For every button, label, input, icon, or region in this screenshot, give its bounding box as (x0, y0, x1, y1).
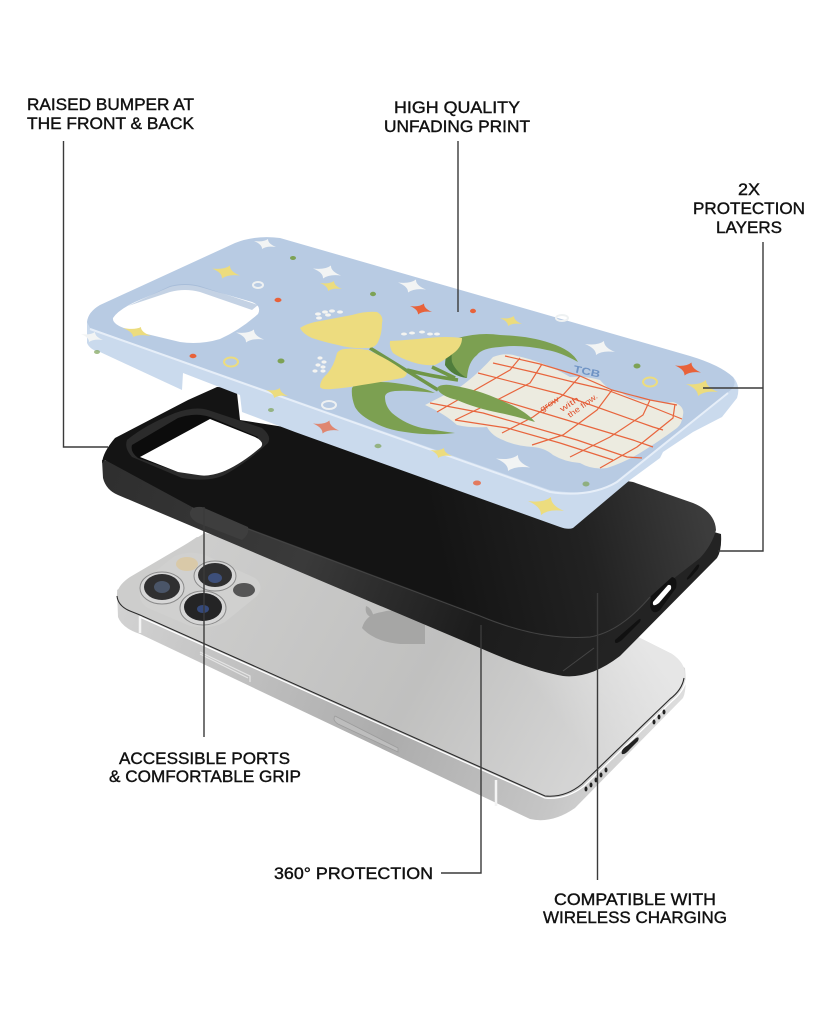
label: wireless charging: COMPATIBLE WITH (554, 890, 716, 909)
camera opening ring (126, 409, 269, 480)
flash (176, 557, 198, 571)
white opening (140, 419, 262, 476)
side button (200, 652, 250, 682)
leader line: raised bumper (64, 141, 108, 447)
antenna bands (140, 616, 496, 806)
case edge highlight (192, 508, 650, 638)
yellow stars (119, 262, 722, 520)
phone rim (117, 596, 684, 796)
label: accessible ports (109, 749, 301, 786)
leader line: 360 protection (441, 625, 481, 873)
black case (102, 387, 721, 676)
blue printed case (78, 236, 738, 529)
label: raised bumper: RAISED BUMPER AT (27, 95, 194, 114)
speaker and port (584, 710, 666, 792)
label: accessible ports: ACCESSIBLE PORTS (119, 749, 290, 768)
rim highlight (90, 329, 728, 494)
upper leaf (445, 334, 578, 378)
handwritten quote: with (557, 395, 581, 414)
label: protection layers: 2X (738, 180, 760, 199)
lower leaf (352, 382, 455, 434)
phone side band (117, 537, 686, 820)
label: wireless charging: WIRELESS CHARGING (543, 908, 727, 927)
case side band (102, 460, 721, 676)
red stars (310, 300, 704, 437)
label: high quality print (384, 98, 530, 136)
label: high quality print: HIGH QUALITY (394, 98, 520, 117)
plant illustration (300, 309, 683, 468)
cream patterned paper (425, 354, 683, 468)
leader line: high quality print (457, 141, 459, 312)
label: raised bumper: THE FRONT & BACK (27, 114, 195, 133)
red dots (190, 298, 481, 486)
red grid lines (430, 356, 682, 468)
camera module (140, 553, 261, 627)
label: protection layers: LAYERS (716, 218, 782, 237)
volume button (334, 716, 398, 752)
white stamens (312, 309, 440, 373)
middle leaf (437, 385, 535, 422)
blue case side band (87, 322, 738, 529)
label: raised bumper (27, 95, 195, 133)
green dots (94, 256, 640, 486)
handwritten quote: grow (538, 395, 561, 414)
camera bump (140, 553, 261, 627)
camera cut-out (113, 285, 259, 343)
label: high quality print: UNFADING PRINT (384, 117, 530, 136)
blue case top face (87, 237, 735, 492)
case side button (190, 507, 248, 540)
leader line: wireless charging (596, 593, 598, 880)
rings (224, 282, 657, 409)
handwritten quote (538, 392, 599, 420)
camera opening wall (132, 415, 258, 472)
label: protection layers: PROTECTION (693, 199, 805, 218)
label: wireless charging (543, 890, 727, 927)
brand mark TCB: TCB (572, 364, 601, 381)
phone back face (117, 533, 685, 795)
white stars (78, 236, 619, 476)
label: accessible ports: & COMFORTABLE GRIP (109, 767, 301, 786)
label: protection layers (693, 180, 805, 237)
label: 360 protection: 360° PROTECTION (274, 864, 433, 883)
silver phone (117, 533, 686, 820)
yellow flowers (300, 312, 462, 389)
main lenses (140, 572, 184, 604)
port openings (615, 564, 699, 643)
handwritten quote: the flow. (566, 392, 599, 420)
leader line: protection layers (703, 242, 763, 551)
case main face (102, 387, 716, 637)
stems (370, 348, 458, 390)
leader line: accessible ports (203, 507, 205, 737)
lidar (233, 583, 255, 597)
apple logo (362, 606, 425, 644)
